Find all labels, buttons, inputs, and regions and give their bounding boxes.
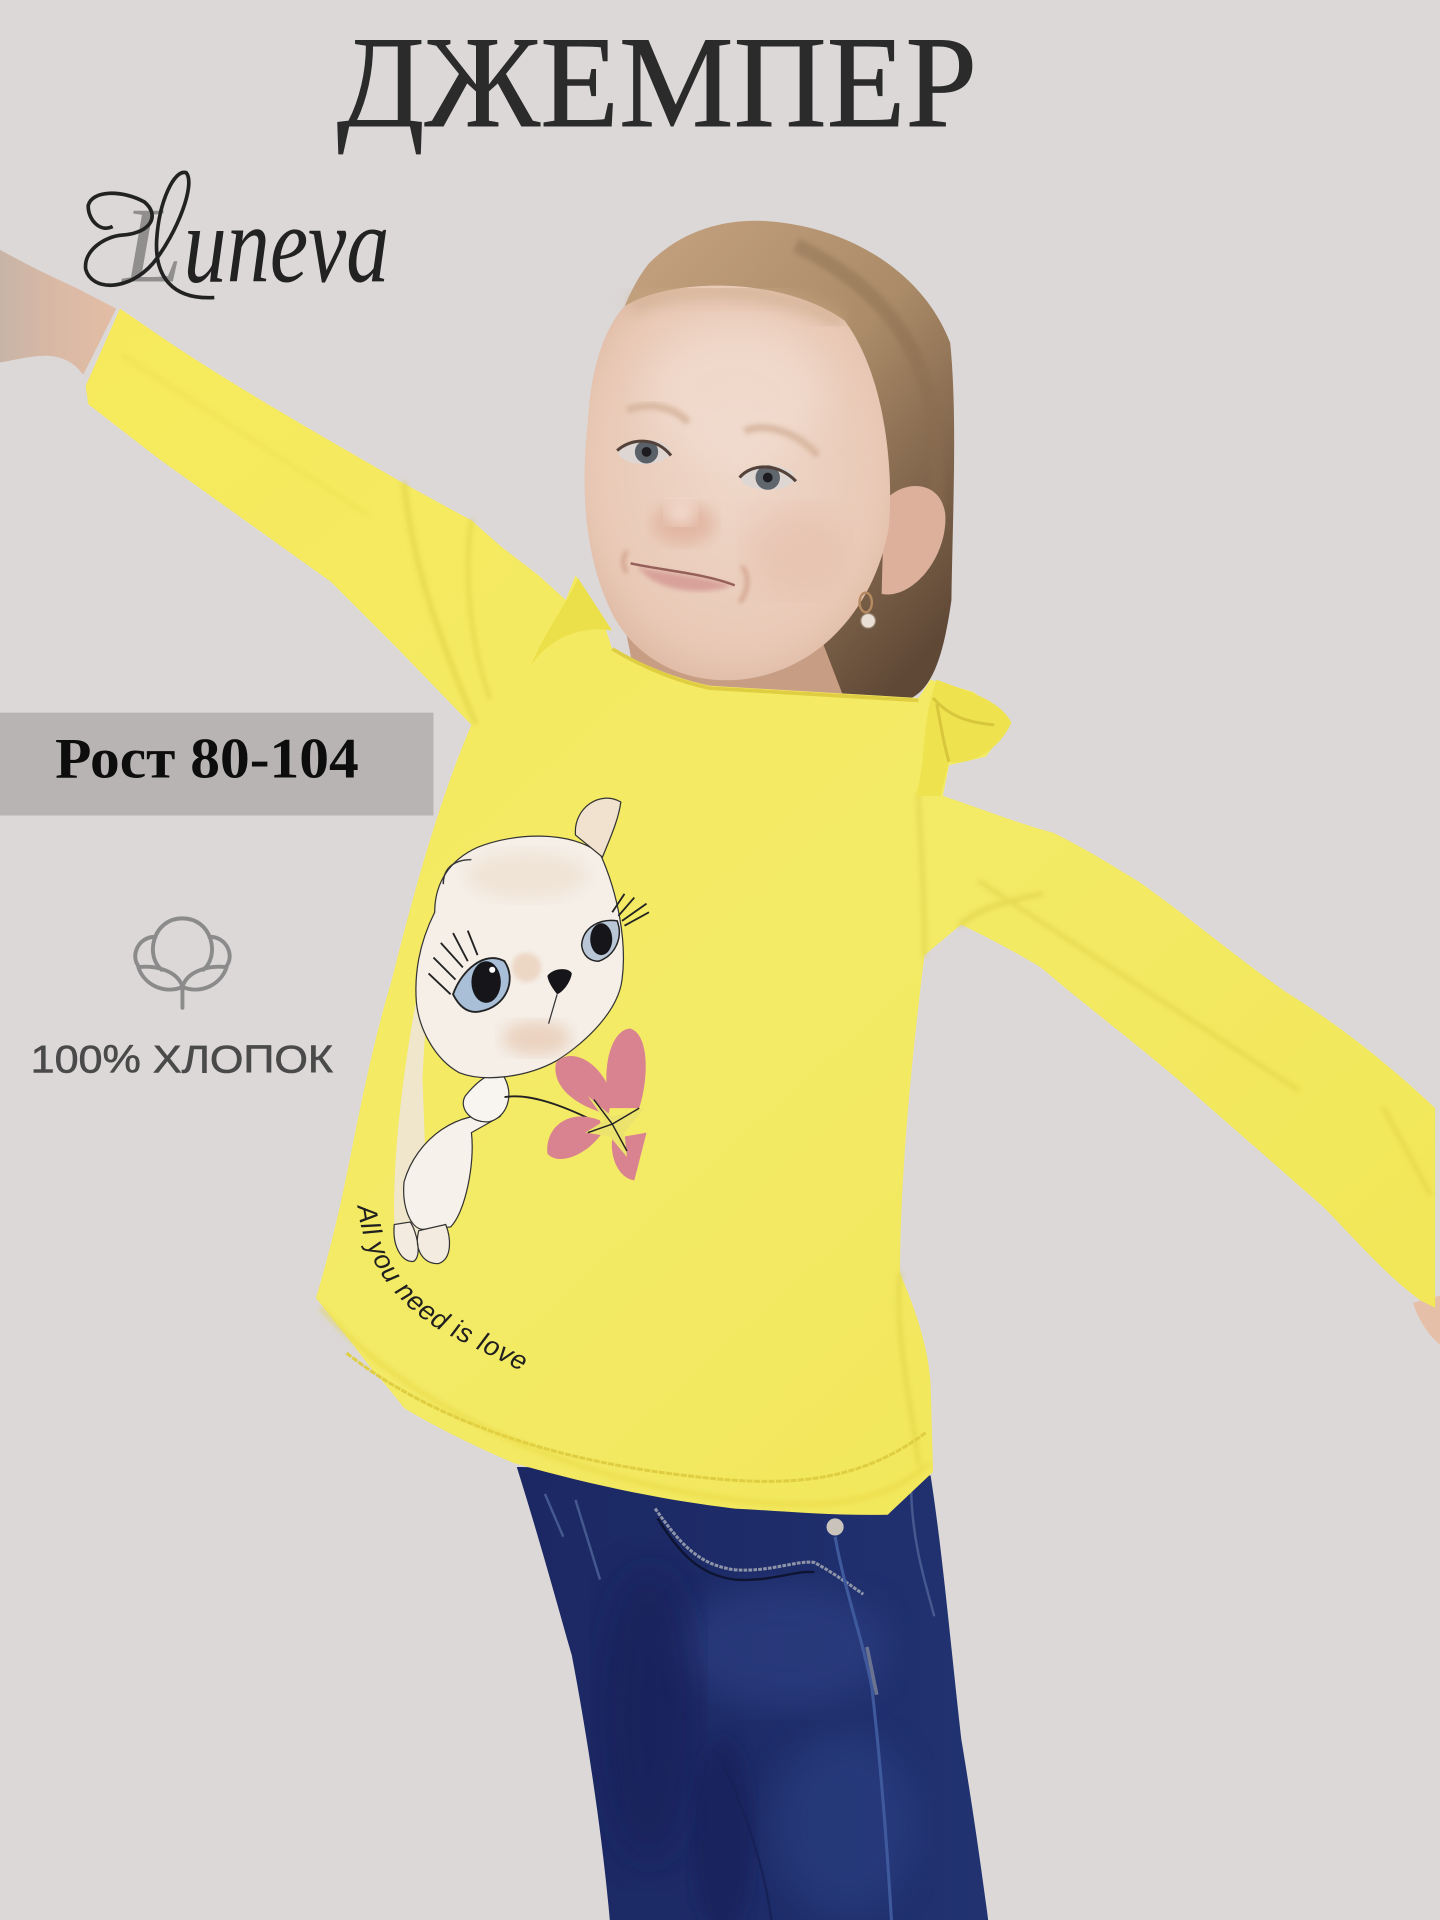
hem stitch (347, 1353, 926, 1481)
right eye (740, 465, 796, 490)
hair braid shading (796, 245, 937, 527)
cat right eye (582, 894, 649, 961)
logo: Luneva: L (120, 187, 182, 306)
logo: Luneva: uneva (184, 184, 389, 306)
cat nose (547, 969, 572, 994)
neck shadow (624, 624, 845, 700)
shirt (86, 309, 1435, 1515)
hem shade (321, 1308, 928, 1504)
cat head (416, 836, 623, 1078)
collar and ruffles (530, 578, 612, 667)
size banner: Рост 80-104 (55, 728, 359, 791)
nose (651, 503, 715, 545)
smile crease (623, 551, 747, 602)
eyebrows (627, 406, 818, 456)
cat body (404, 1115, 500, 1229)
cheek blush (747, 508, 845, 594)
flower centre (585, 1096, 644, 1157)
jeans (502, 1457, 1004, 1920)
print: cat with flower (394, 798, 649, 1264)
print caption: All you need is love (357, 1205, 526, 1369)
face (585, 286, 890, 680)
tail (394, 931, 431, 1253)
size banner (0, 713, 433, 816)
cat paw (463, 1074, 509, 1122)
print caption (357, 1160, 616, 1369)
flower petals (547, 1029, 647, 1180)
right hand fragment (1413, 1296, 1440, 1344)
cat shading (465, 851, 588, 900)
hair (600, 221, 954, 700)
sleeve folds (122, 355, 1430, 1463)
title: ДЖЕМПЕР (337, 10, 977, 155)
fabric label: 100% ХЛОПОК (31, 1039, 333, 1082)
mouth (636, 566, 732, 591)
cat ear (575, 798, 621, 857)
ear (882, 486, 945, 594)
cat feet (394, 1222, 450, 1264)
ruffle fold (933, 698, 994, 762)
cat left eye (429, 931, 510, 1012)
icon: cotton boll (135, 918, 230, 1008)
flower stem (504, 1096, 600, 1124)
raised hand (0, 250, 116, 375)
cat mouth (549, 994, 557, 1024)
logo: Luneva (86, 172, 389, 306)
earring (860, 593, 876, 628)
left eye (617, 440, 671, 464)
